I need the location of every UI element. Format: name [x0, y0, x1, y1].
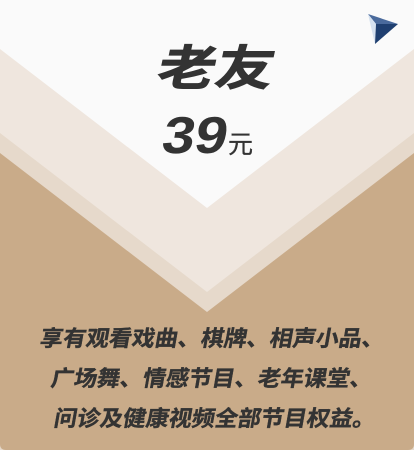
price number: 39 [158, 106, 233, 164]
title: 老友 [153, 42, 280, 96]
icon: blue paper arrow [368, 14, 398, 44]
description text [38, 326, 387, 431]
panel: tan lower chevron [0, 153, 414, 450]
description line 2: 广场舞、情感节目、老年课堂、 [49, 366, 375, 391]
price unit: 元 [228, 131, 253, 159]
description line 3: 问诊及健康视频全部节目权益。 [52, 406, 378, 431]
panel: mid beige chevron [0, 133, 414, 450]
price [158, 106, 253, 164]
description line 1: 享有观看戏曲、棋牌、相声小品、 [38, 326, 387, 351]
